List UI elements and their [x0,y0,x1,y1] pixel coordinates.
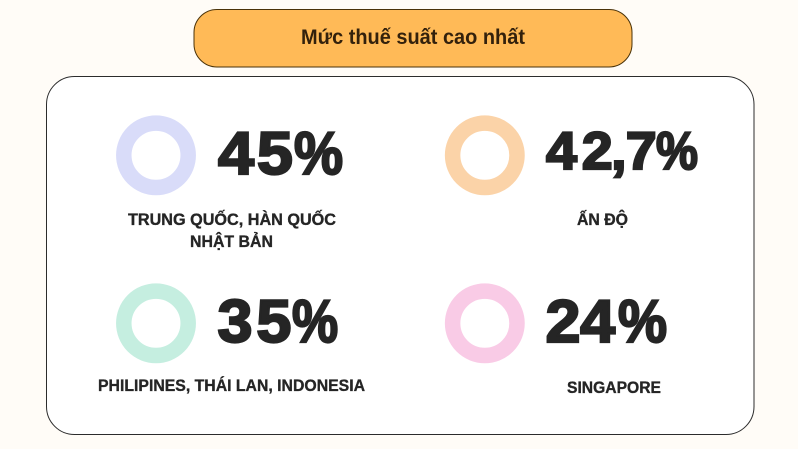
value: 35%: 35 [218,288,291,356]
label: Singapore: SINGAPORE [567,379,661,397]
stat: 24% Singapore [453,288,667,397]
panel: tax rates [46,76,754,434]
stat: 42,7% India [453,121,698,229]
value: 42,7%: 42,7 [546,121,657,181]
label: Trung Quốc, Hàn Quốc, Nhật Bản [128,209,336,251]
title banner: Mức thuế suất cao nhất [301,26,525,49]
value: 45% [218,120,343,188]
value: 24% [546,288,667,356]
label: Philipines, Thái Lan, Indonesia: PHILIPINES, THÁI LAN, INDONESIA [98,376,365,395]
value: 24%: % [618,289,667,356]
label: Trung Quốc, Hàn Quốc, Nhật Bản: NHẬT BẢN [190,232,273,251]
icon: lavender ring [124,123,188,188]
value: 35%: % [292,287,338,355]
stat: 45% China, Korea, Japan [124,120,343,251]
icon: pink ring [453,291,517,355]
title banner [194,10,632,67]
value: 42,7%: % [656,121,698,181]
value: 35% [218,287,338,356]
icon: orange ring [453,123,517,188]
value: 24%: 24 [546,288,615,356]
label: Trung Quốc, Hàn Quốc, Nhật Bản: TRUNG QUỐC, HÀN QUỐC [128,209,336,229]
icon: mint ring [124,291,188,355]
label: Ấn Độ: ẤN ĐỘ [577,210,628,229]
stat: 35% Philippines, Thailand, Indonesia [98,287,365,395]
value: 45%: 45 [218,120,293,187]
value: 45%: % [294,121,343,188]
